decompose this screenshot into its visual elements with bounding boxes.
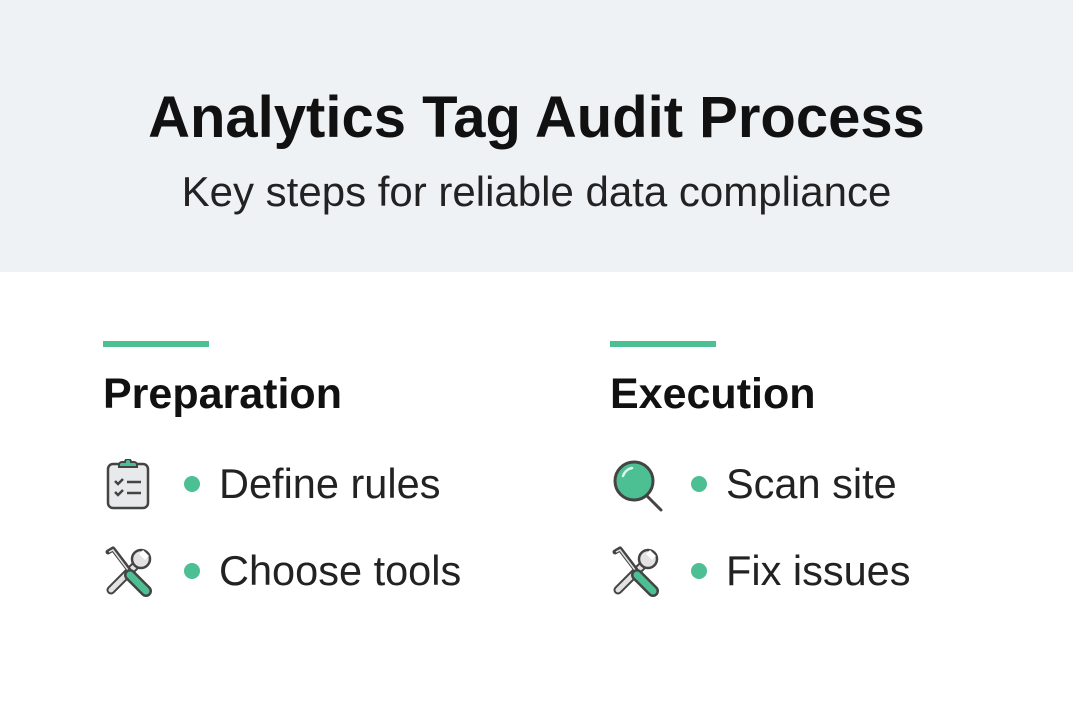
icon: tools (106, 546, 152, 597)
text: Fix issues (726, 547, 910, 594)
panel: preparation (103, 341, 461, 597)
header background (0, 0, 1073, 272)
item: define rules (106, 459, 440, 510)
bullet (691, 563, 707, 579)
icon: magnifier (614, 460, 663, 512)
item: fix issues (612, 546, 910, 597)
item: choose tools (106, 546, 461, 597)
text: Choose tools (219, 547, 461, 594)
icon: clipboard (106, 459, 150, 510)
panel: execution (610, 341, 910, 597)
text: Define rules (219, 460, 440, 507)
heading: Preparation (103, 370, 342, 418)
title: Analytics Tag Audit Process (148, 85, 925, 150)
accent bar (610, 341, 716, 347)
subtitle: Key steps for reliable data compliance (182, 168, 891, 215)
icon: tools (612, 546, 659, 597)
text: Scan site (726, 460, 897, 507)
heading: Execution (610, 370, 816, 418)
accent bar (103, 341, 209, 347)
bullet (184, 563, 200, 579)
bullet (184, 476, 200, 492)
item: scan site (614, 460, 897, 512)
bullet (691, 476, 707, 492)
